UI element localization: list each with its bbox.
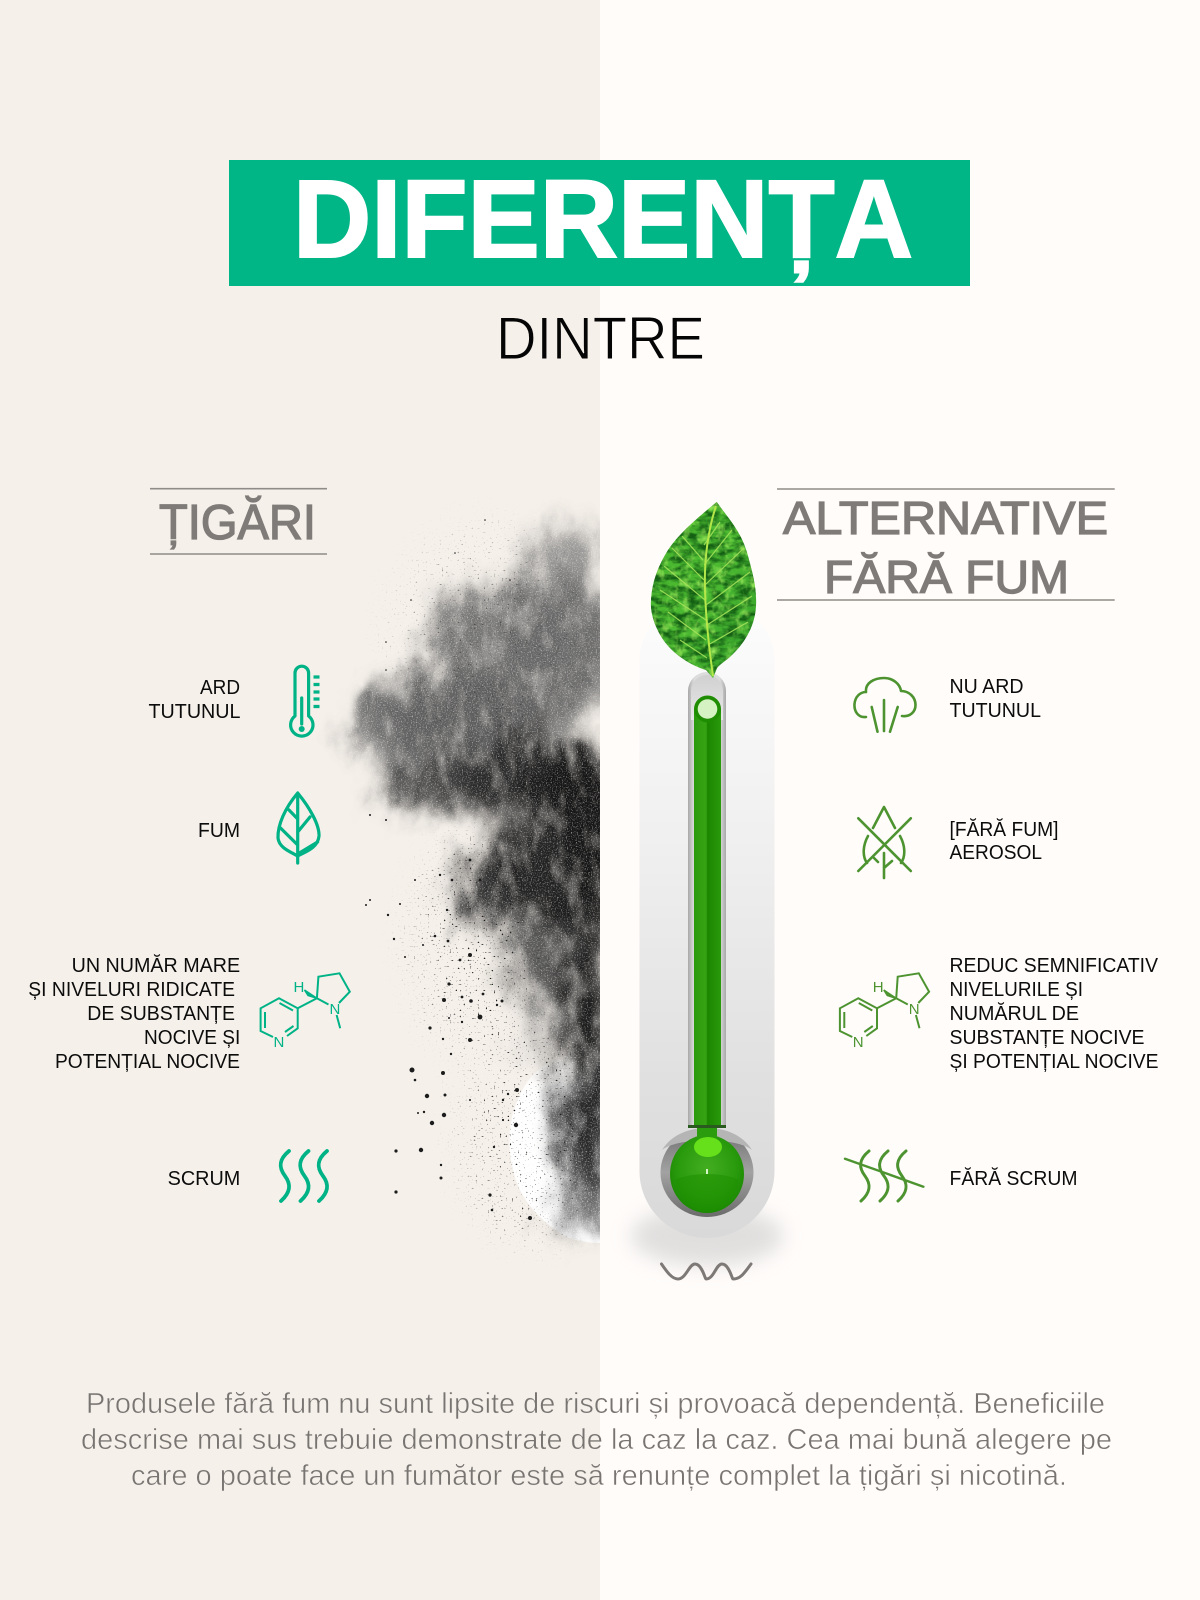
thermometer shadow [631, 1206, 783, 1266]
subtitle: DINTRE [496, 304, 705, 372]
row: harmful substances, cigarettes: POTENȚIAL NOCIVE [55, 1051, 240, 1073]
title banner: DIFERENȚA [293, 158, 913, 281]
heading: cigarettes: ȚIGĂRI [159, 496, 316, 550]
icon: nicotine molecule, green [840, 973, 929, 1051]
row: does not burn tobacco: TUTUNUL [950, 700, 1041, 722]
thermometer illustration [631, 617, 783, 1279]
icon: nicotine molecule, green: N [853, 1034, 864, 1051]
icon: nicotine molecule: H [294, 979, 304, 996]
icon: thermometer [291, 666, 320, 736]
row: reduced harmful substances: ȘI POTENȚIAL NOCIVE [950, 1051, 1158, 1073]
row: reduced harmful substances [950, 955, 1159, 1073]
icon: nicotine molecule: N [274, 1034, 284, 1051]
row: harmful substances, cigarettes: DE SUBSTANȚE [87, 1003, 235, 1025]
icon: nicotine molecule: N [330, 1001, 340, 1018]
row: no ash: FĂRĂ SCRUM [950, 1167, 1078, 1190]
fine dust speckles [395, 530, 592, 1235]
row: smoke-free aerosol [950, 818, 1058, 864]
icon: crossed-out ash waves [845, 1151, 923, 1201]
row: burns tobacco: TUTUNUL [148, 701, 240, 723]
row: harmful substances, cigarettes: ȘI NIVELURI RIDICATE [28, 979, 235, 1001]
thermometer body [640, 617, 774, 1238]
row: harmful substances, cigarettes: NOCIVE ȘI [144, 1027, 240, 1049]
row: burns tobacco: ARD [200, 677, 240, 699]
row: does not burn tobacco: NU ARD [950, 676, 1024, 698]
smoke cloud illustration [349, 519, 632, 1243]
icon: nicotine molecule, green: N [909, 1001, 920, 1018]
footer disclaimer [81, 1388, 1112, 1492]
heading: smoke-free alternatives [777, 489, 1115, 603]
icon: crossed-out drop [858, 807, 911, 878]
mercury column [688, 696, 726, 1128]
row: harmful substances, cigarettes: UN NUMĂR MARE [72, 954, 240, 977]
row: harmful substances, cigarettes [28, 954, 240, 1073]
row: reduced harmful substances: SUBSTANȚE NOCIVE [950, 1027, 1144, 1049]
row: reduced harmful substances: NIVELURILE ȘI [950, 979, 1083, 1001]
row: ash: SCRUM [168, 1168, 240, 1190]
thermometer glass tube [688, 672, 726, 1128]
heat squiggle [662, 1264, 751, 1279]
icon: nicotine molecule, green: H [873, 979, 884, 996]
icon: steam cloud [854, 678, 916, 732]
tobacco leaf [650, 502, 756, 678]
icon: ash waves [281, 1151, 327, 1201]
row: does not burn tobacco [950, 676, 1041, 722]
thermometer bulb [660, 1128, 754, 1217]
footer disclaimer: Produsele fără fum nu sunt lipsite de riscuri și provoacă dependență. Beneficiile [86, 1388, 1105, 1420]
panel: right background [600, 0, 1200, 1600]
row: reduced harmful substances: REDUC SEMNIFICATIV [950, 955, 1159, 977]
heading: smoke-free alternatives: FĂRĂ FUM [824, 551, 1069, 603]
row: burns tobacco [148, 677, 240, 723]
icon: nicotine molecule [261, 973, 350, 1051]
icon: leaf [278, 793, 319, 863]
coarse dust particles [365, 519, 532, 1220]
panel: left background [0, 0, 600, 1600]
row: reduced harmful substances: NUMĂRUL DE [950, 1002, 1079, 1025]
footer disclaimer: care o poate face un fumător este să renunțe complet la țigări și nicotină. [131, 1460, 1067, 1492]
row: smoke-free aerosol: AEROSOL [950, 842, 1042, 864]
row: smoke: FUM [198, 820, 240, 842]
heading: smoke-free alternatives: ALTERNATIVE [783, 492, 1108, 544]
footer disclaimer: descrise mai sus trebuie demonstrate de la caz la caz. Cea mai bună alegere pe [81, 1424, 1112, 1456]
row: smoke-free aerosol: [FĂRĂ FUM] [950, 818, 1058, 841]
